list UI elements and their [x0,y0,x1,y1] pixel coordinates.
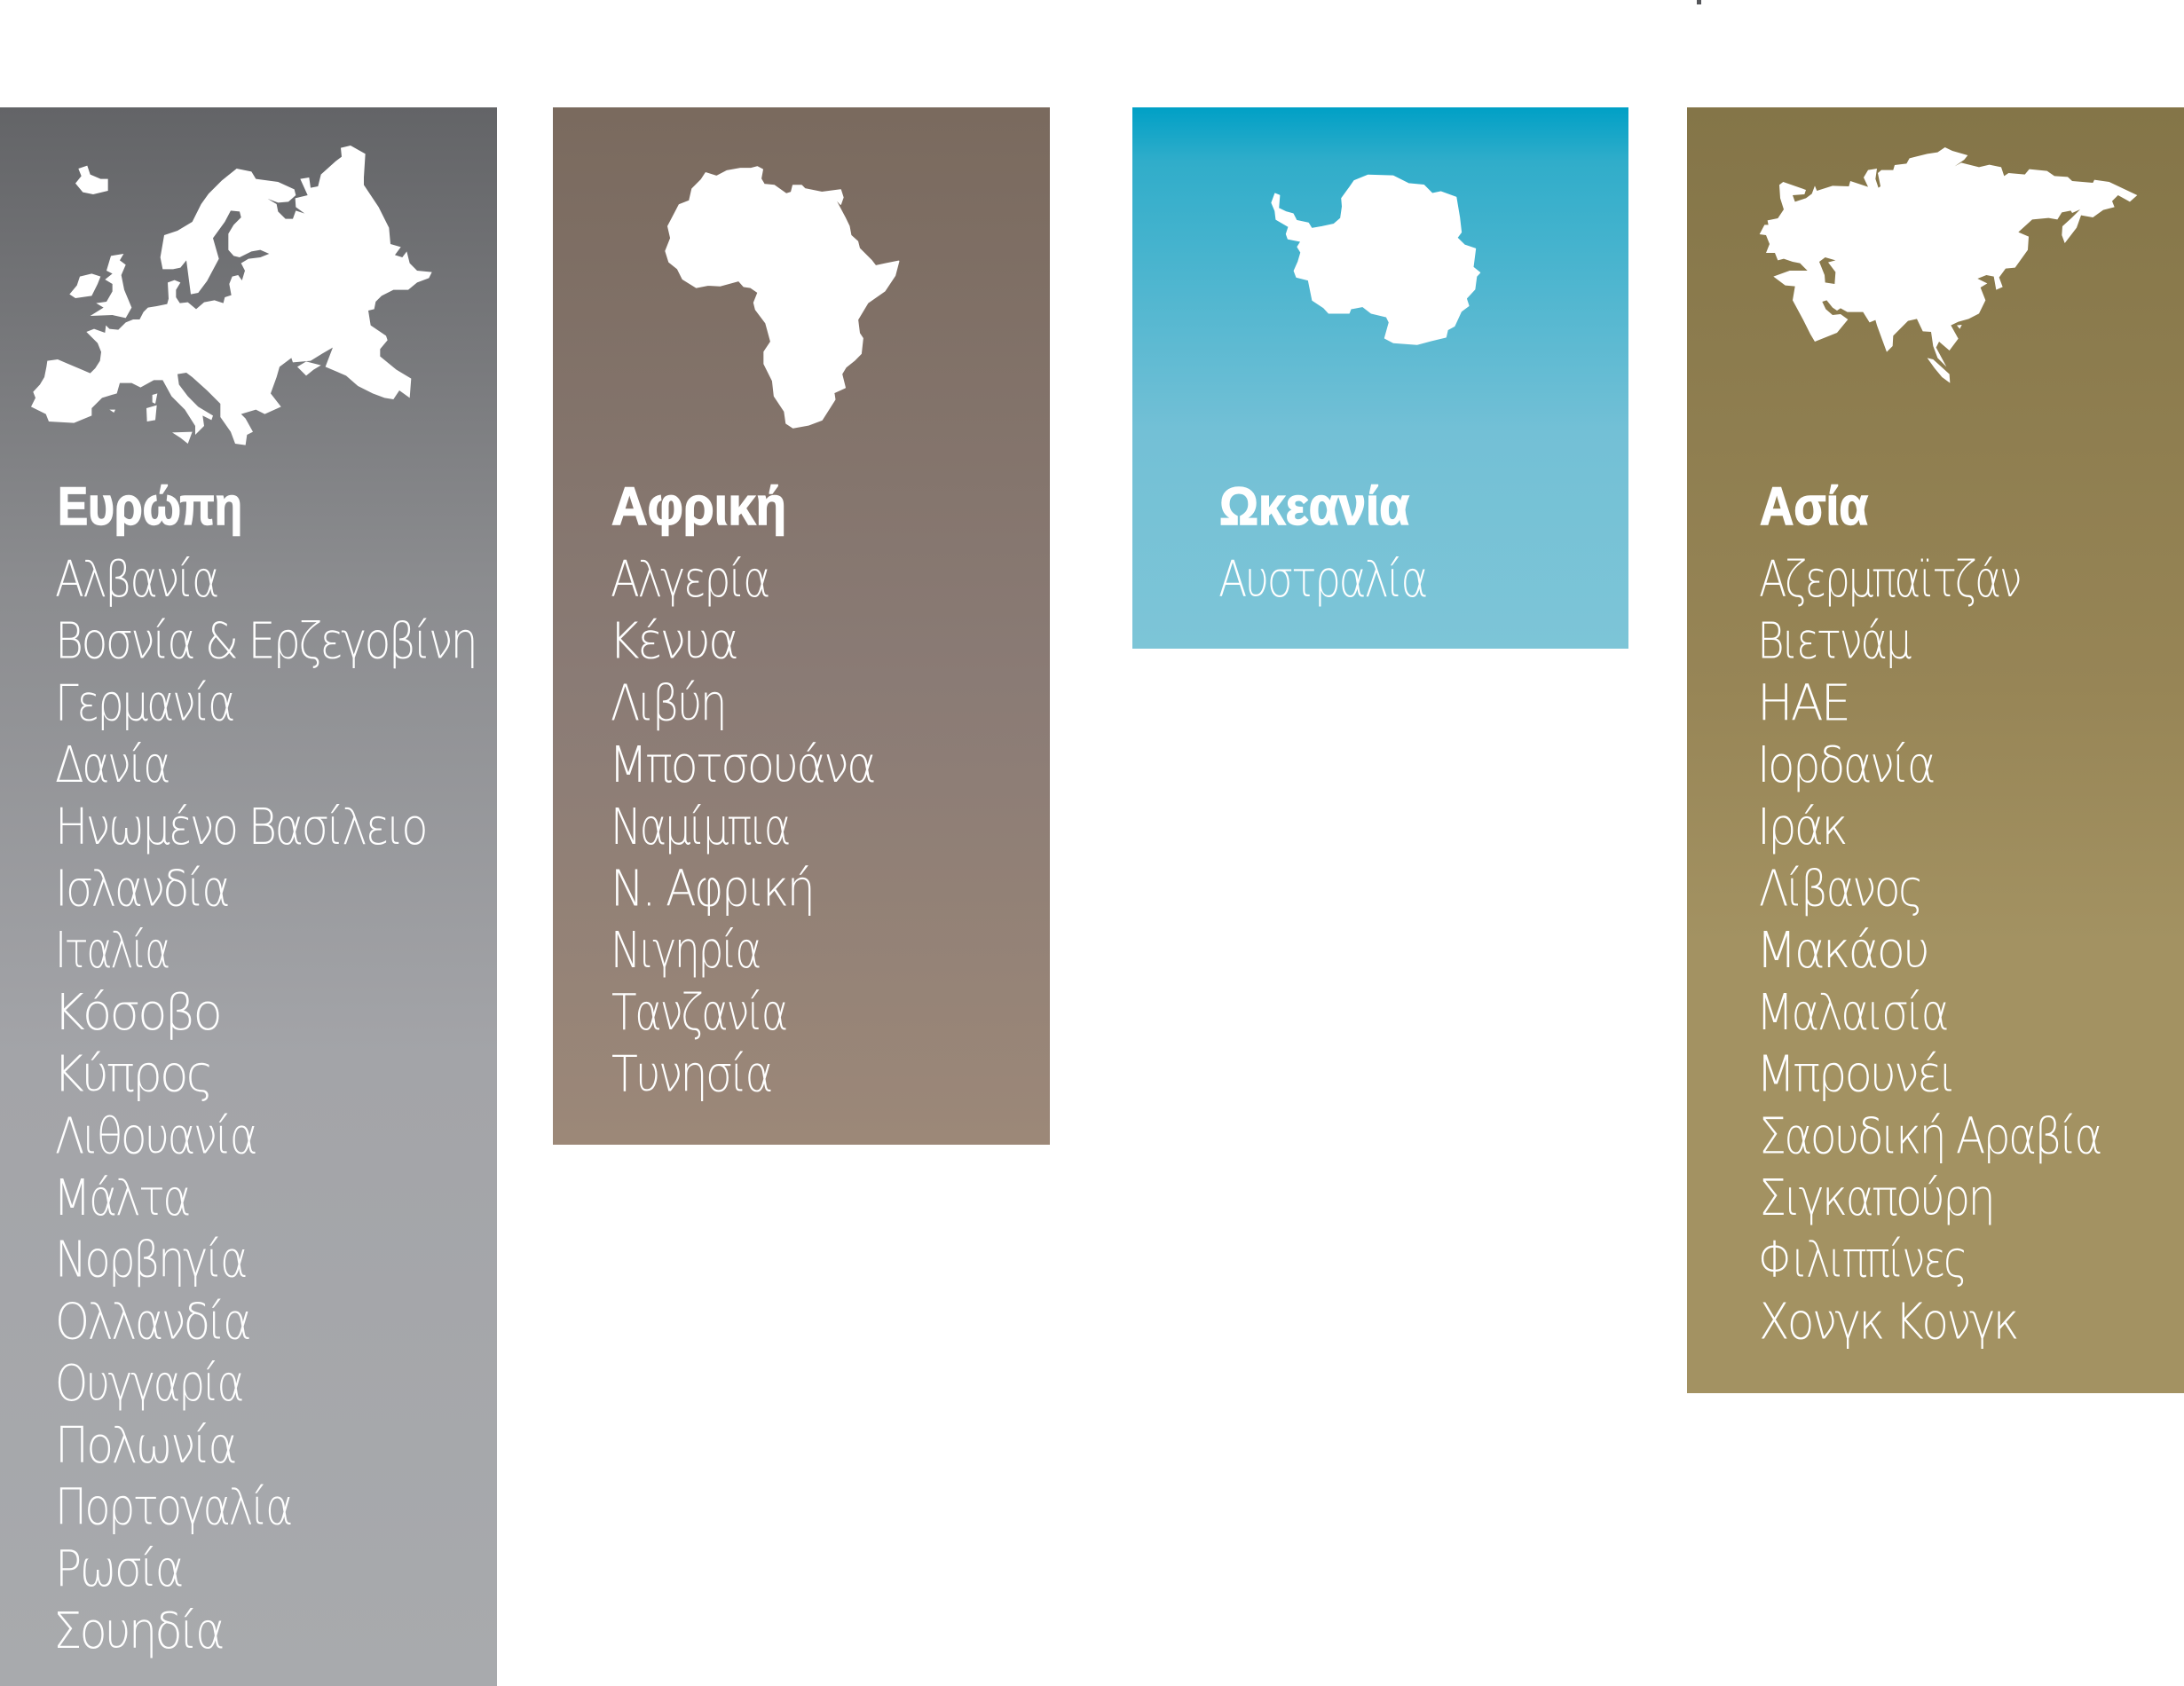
panel: Asia [1687,107,2184,1393]
country list: Africa: Μποτσουάνα [609,737,874,794]
country list: Africa: Αλγερία [611,551,769,609]
country list: Europe: Κύπρος [53,1046,211,1104]
country list: Europe: Πολωνία [55,1417,235,1475]
country list: Europe: Νορβηγία [55,1232,246,1289]
country list: Europe: Κόσοβο [53,984,220,1042]
country list: Africa: Ν. Αφρική [611,861,813,918]
panel: Europe [0,107,497,1686]
country list: Europe: Ουγγαρία [55,1355,242,1413]
icon: map of Antarctica [1272,175,1480,344]
panel background: Asia [1687,107,2184,1393]
heading: Asia: Ασία [1760,477,1868,536]
country list: Europe: Σουηδία [53,1603,223,1660]
country list: Europe: Μάλτα [53,1170,189,1227]
country list: Europe: Γερμανία [55,674,233,732]
country list: Asia: Ιράκ [1757,799,1846,856]
icon: map of Asia [1760,147,2137,383]
country list: Asia: Χονγκ Κονγκ [1759,1293,2017,1351]
country list: Europe: Ρωσία [55,1540,182,1598]
country list: Asia: Βιετνάμ [1757,613,1912,671]
country list: Asia: Μαλαισία [1756,984,1947,1042]
country list: Asia: ΗΑΕ [1757,674,1849,732]
country list: Europe [53,551,476,1660]
country list: Europe: Ολλανδία [55,1293,249,1351]
country list: Africa [609,551,874,1104]
country list: Europe: Λιθουανία [55,1107,256,1165]
country list: Asia: Μπρουνέι [1756,1046,1954,1104]
country list: Africa: Κένυα [609,613,737,671]
country list: Europe: Αλβανία [55,551,217,609]
country list: Europe: Ιταλία [55,922,169,980]
country list: Asia: Σιγκαπούρη [1759,1170,1993,1227]
panel background: Oceania [1132,107,1628,649]
panel background: Europe [0,107,497,1686]
country list: Asia: Φιλιππίνες [1758,1232,1966,1289]
country list: Europe: Ισλανδία [55,861,228,918]
icon: map of Europe [31,146,432,445]
country list: Africa: Ναμίμπια [611,799,789,856]
small dot at top edge [1697,0,1701,4]
country list: Oceania: Αυστραλία [1218,551,1426,609]
country list: Africa: Νιγηρία [611,922,760,980]
country list: Asia: Μακάου [1756,922,1928,980]
panel: Oceania [1132,107,1628,649]
country list: Europe: Βοσνία & Ερζεγοβίνη [55,613,476,671]
heading: Europe: Ευρώπη [58,477,242,536]
country list: Africa: Λιβύη [611,674,725,732]
heading: Oceania: Ωκεανία [1219,477,1409,536]
panel: Africa [553,107,1050,1145]
country list: Asia: Αζερμπαϊτζάν [1759,551,2020,609]
country list: Europe: Δανία [55,737,169,794]
heading: Africa: Αφρική [611,477,786,536]
country list: Asia: Σαουδική Αραβία [1759,1107,2101,1165]
country list: Asia: Ιορδανία [1757,737,1934,794]
country list: Africa: Τανζανία [611,984,786,1042]
country list: Europe: Πορτογαλία [55,1478,291,1537]
country list: Asia: Λίβανος [1759,861,1921,918]
country list: Asia [1756,551,2101,1351]
icon: map of Africa [666,167,899,428]
country list: Europe: Ηνωμένο Βασίλειο [55,799,426,856]
panel background: Africa [553,107,1050,1145]
country list: Africa: Τυνησία [611,1046,771,1104]
